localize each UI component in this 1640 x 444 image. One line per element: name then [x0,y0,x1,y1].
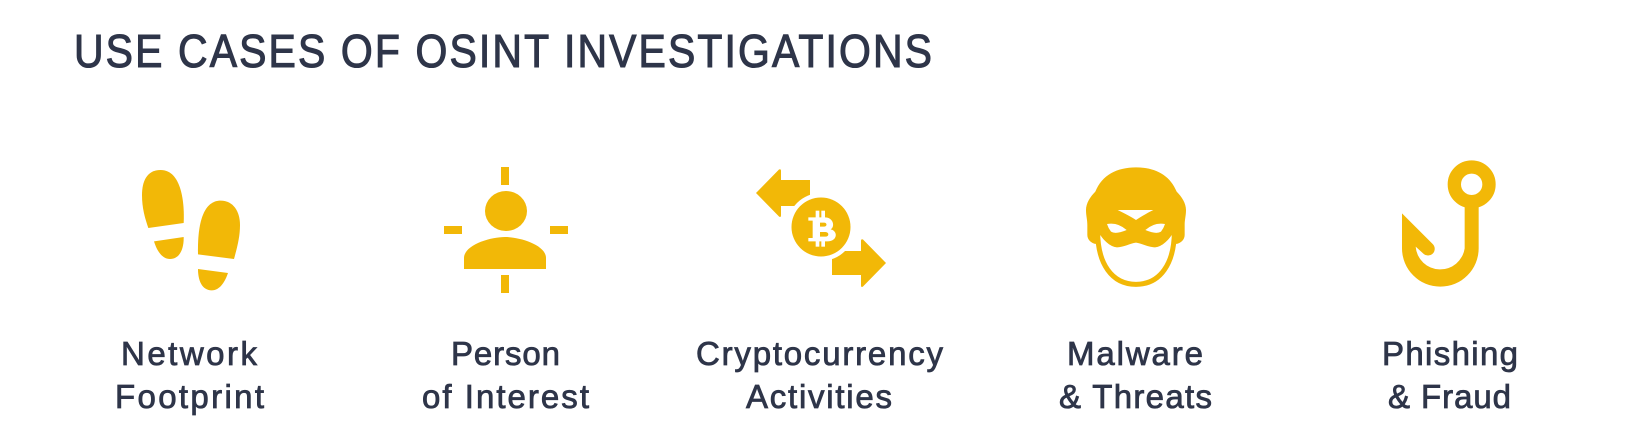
label: phishing and fraud: Phishing [1382,335,1518,372]
label: malware and threats [1059,335,1212,415]
icon: fishing hook [1402,167,1489,287]
label: phishing and fraud [1382,335,1518,415]
icon: footprints [142,170,240,290]
label: person of interest [422,335,589,415]
label: cryptocurrency activities [696,335,944,415]
label: phishing and fraud: & Fraud [1388,378,1511,415]
icon: cryptocurrency exchange [756,169,886,287]
label: network footprint: Footprint [115,378,264,415]
label: malware and threats: Malware [1067,335,1203,372]
label: malware and threats: & Threats [1059,378,1212,415]
icon: person of interest [444,167,568,293]
label: network footprint: Network [121,335,258,372]
label: network footprint [115,335,264,415]
label: cryptocurrency activities: Cryptocurrency [696,335,944,372]
label: cryptocurrency activities: Activities [746,378,892,415]
icon: masked hacker [1086,167,1186,284]
label: person of interest: of Interest [422,378,589,415]
label: person of interest: Person [451,335,560,372]
title: USE CASES OF OSINT INVESTIGATIONS [74,27,932,78]
